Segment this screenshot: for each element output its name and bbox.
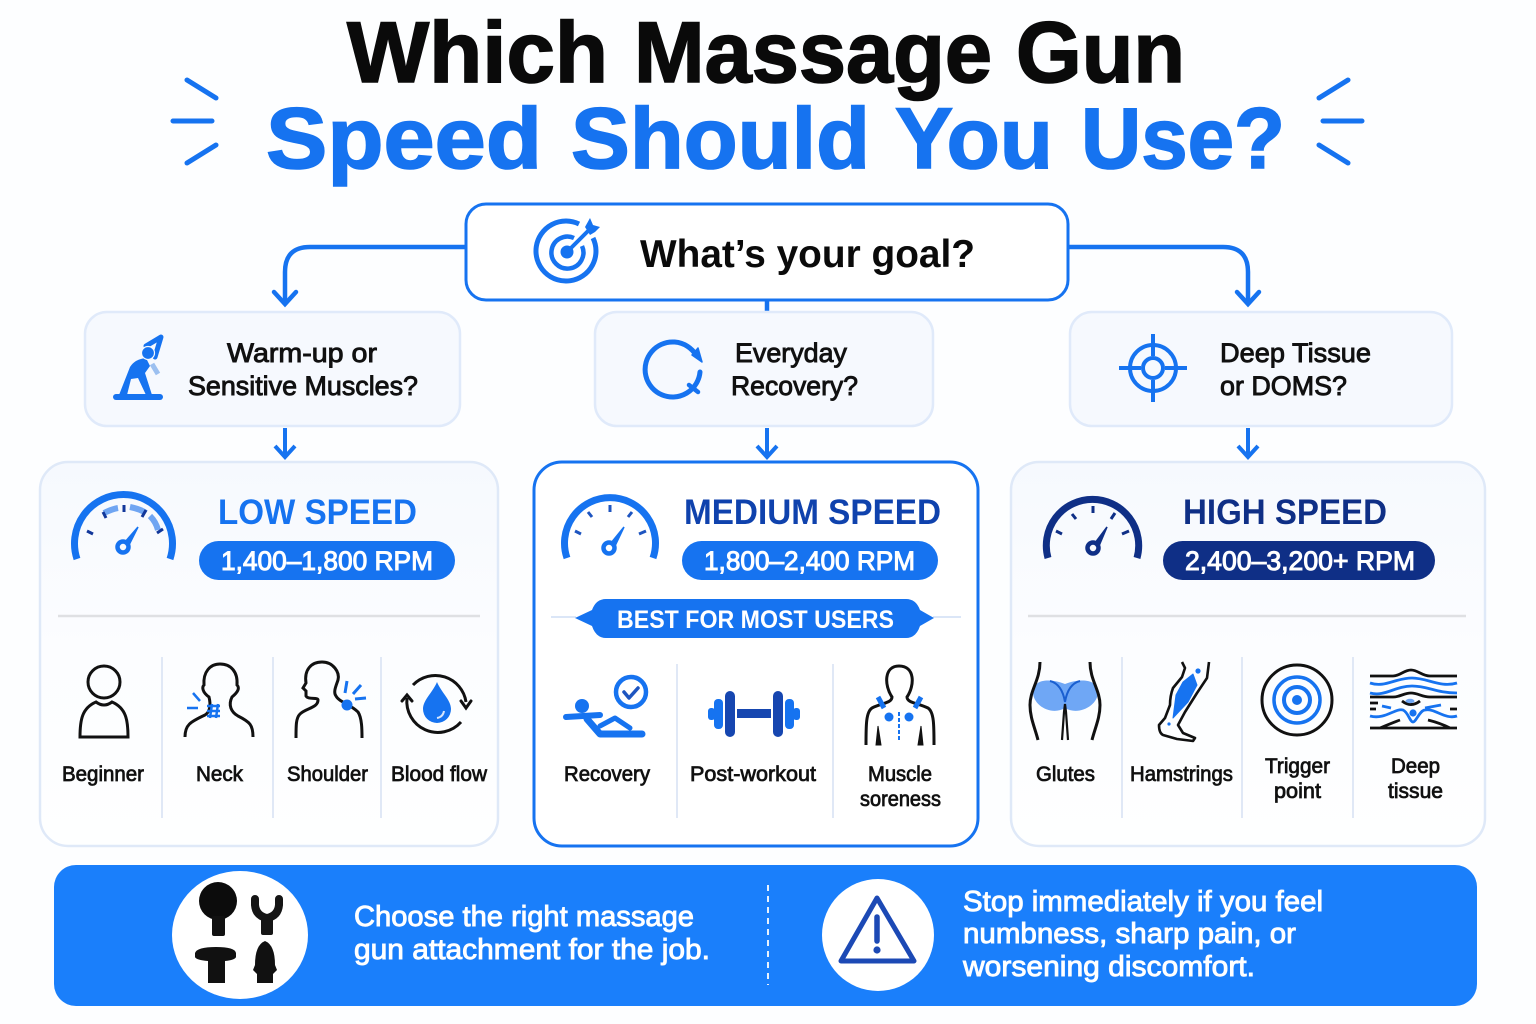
panel: goal question [466,204,1068,300]
arrow: recovery to medium speed [757,428,777,457]
icon: massage attachments [172,871,308,999]
label: trigger point [1265,755,1330,803]
attachment tip text [354,901,710,966]
icon: dumbbell [708,691,800,737]
high speed rpm pill [1163,541,1435,580]
icon: deep tissue [1370,670,1457,728]
panel: warm-up question [85,312,460,426]
panel: high speed [1011,462,1485,846]
label: muscle soreness: soreness [860,788,941,811]
title: Which [347,5,608,101]
icon: neck [185,664,253,737]
arrow: goal to deep tissue [1068,247,1259,304]
medium speed rpm pill [682,541,938,580]
icon: glutes [1030,662,1100,740]
icon: recovery [566,677,646,734]
label: trigger point: Trigger [1265,755,1330,778]
panel: bottom tips bar [54,865,1477,1006]
label: muscle soreness: Muscle [868,763,932,786]
title: Speed [266,91,542,187]
label: deep tissue [1388,755,1443,803]
arrow: warm-up to low speed [275,428,295,457]
icon: stretching figure [113,337,163,400]
icon: left emphasis ticks [173,80,216,163]
icon: muscle soreness [866,666,934,745]
arrow: deep tissue to high speed [1238,428,1258,457]
panel: everyday recovery question [595,312,933,426]
icon: trigger point [1262,665,1332,735]
safety warning text: numbness, sharp pain, or [963,918,1296,950]
low speed rpm pill: 1,400–1,800 RPM [221,546,433,576]
medium speed heading: MEDIUM SPEED [684,493,941,532]
title: Massage [634,5,992,101]
safety warning text [962,886,1323,983]
recovery text: Everyday [735,338,847,368]
icon: beginner [80,666,128,737]
icon: low speed gauge [75,495,172,559]
label: shoulder: Shoulder [287,763,368,786]
safety warning text: worsening discomfort. [962,951,1255,983]
label: glutes: Glutes [1036,763,1095,786]
label: hamstrings: Hamstrings [1130,763,1233,786]
icon: medium speed gauge [564,498,655,558]
title [266,5,1285,187]
label: deep tissue: tissue [1388,780,1443,803]
label: beginner: Beginner [62,763,144,786]
deep tissue text: or DOMS? [1220,371,1347,401]
title: Gun [1016,5,1185,101]
panel: low speed [40,462,498,846]
warm-up text: Sensitive Muscles? [188,371,418,401]
label: muscle soreness [860,763,941,811]
icon: blood flow [402,676,471,732]
best for most users banner: BEST FOR MOST USERS [617,606,894,634]
recovery text [731,338,858,401]
label: deep tissue: Deep [1391,755,1440,778]
warm-up text: Warm-up or [227,338,377,368]
goal text: What’s your goal? [640,233,975,276]
title: Use? [1081,91,1285,187]
icon: hamstrings [1159,662,1209,741]
panel: medium speed [534,462,978,846]
best for most users banner [575,599,934,638]
medium speed rpm pill: 1,800–2,400 RPM [704,546,915,576]
icon: shoulder [296,662,366,738]
icon: refresh loop [645,342,702,397]
recovery text: Recovery? [731,371,858,401]
label: blood flow: Blood flow [391,763,488,786]
panel: deep tissue question [1070,312,1452,426]
deep tissue text [1220,338,1371,401]
label: post-workout: Post-workout [690,763,816,786]
label: neck: Neck [196,763,243,786]
title: You [895,91,1053,187]
label: trigger point: point [1274,780,1321,803]
attachment tip text: gun attachment for the job. [354,934,710,966]
label: recovery: Recovery [564,763,650,786]
attachment tip text: Choose the right massage [354,901,694,933]
icon: right emphasis ticks [1319,80,1362,163]
warm-up text [188,338,418,401]
low speed rpm pill [199,541,455,580]
low speed heading: LOW SPEED [218,493,417,532]
high speed rpm pill: 2,400–3,200+ RPM [1185,546,1415,576]
icon: high speed gauge [1046,499,1139,558]
arrow: goal to warm-up [274,247,465,304]
icon: warning triangle [822,879,934,991]
title: Should [571,91,870,187]
deep tissue text: Deep Tissue [1220,338,1371,368]
safety warning text: Stop immediately if you feel [963,886,1323,918]
icon: crosshair [1119,334,1187,402]
arrow: goal to everyday recovery [765,300,769,312]
high speed heading: HIGH SPEED [1183,493,1387,532]
icon: target with dart [536,218,600,281]
